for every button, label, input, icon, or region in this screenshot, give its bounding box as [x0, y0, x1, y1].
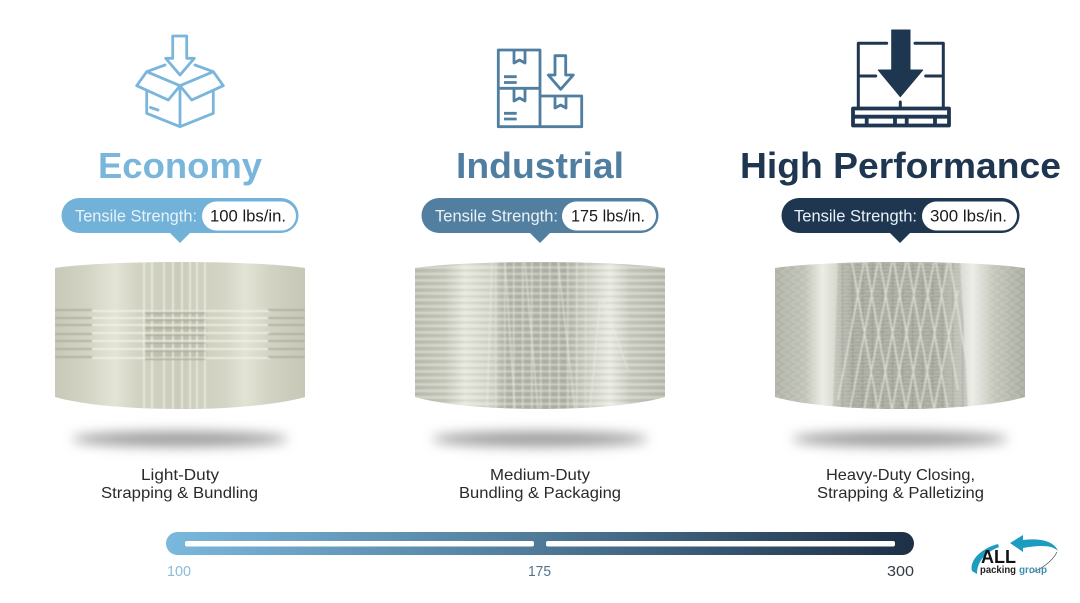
panel: economy: [55, 36, 305, 502]
heading: Industrial: Industrial: [456, 145, 624, 186]
caption: Strapping & Palletizing: [817, 485, 984, 502]
caption: Heavy-Duty Closing,: [826, 467, 975, 484]
tape roll: high performance: [775, 262, 1025, 409]
caption: Bundling & Packaging: [459, 485, 621, 502]
heading: High Performance: High Performance: [740, 145, 1061, 186]
caption: Light-Duty: [141, 467, 219, 484]
tape roll: industrial: [415, 262, 665, 409]
tape roll: economy: [55, 255, 305, 415]
heading: Economy: Economy: [98, 145, 262, 186]
caption: [459, 467, 621, 502]
tensile strength pill: Tensile Strength:: [435, 208, 558, 226]
icon: stacked boxes with arrow: [498, 50, 582, 127]
tensile strength scale bar: [166, 532, 914, 580]
logo: ALL packing group: packing: [980, 565, 1016, 576]
shadow under roll: [792, 432, 1008, 446]
tensile strength scale bar: 300: [887, 563, 914, 580]
caption: [817, 467, 984, 502]
shadow under roll: [72, 432, 288, 446]
tensile strength pill: Tensile Strength:: [794, 208, 917, 226]
tensile strength pill: [61, 198, 298, 243]
tensile strength pill: [422, 198, 658, 243]
tensile strength scale bar: 175: [528, 563, 551, 580]
tensile strength pill: 175 lbs/in.: [571, 208, 645, 226]
caption: Medium-Duty: [490, 467, 590, 484]
logo: ALL packing group: ALL: [981, 547, 1016, 567]
tensile strength pill: [782, 198, 1020, 243]
shadow under roll: [432, 432, 648, 446]
logo: ALL packing group: [972, 535, 1058, 576]
tensile strength pill: 100 lbs/in.: [210, 208, 286, 226]
tensile strength scale bar: 100: [167, 563, 191, 580]
panel: high performance: [740, 30, 1061, 502]
logo: ALL packing group: group: [1019, 565, 1047, 576]
tensile strength pill: 300 lbs/in.: [930, 208, 1007, 226]
tensile strength pill: Tensile Strength:: [75, 208, 197, 226]
panel: industrial: [405, 50, 675, 502]
icon: pallet with heavy arrow: [853, 30, 949, 126]
caption: [101, 467, 258, 502]
icon: box with down arrow: [137, 36, 223, 127]
caption: Strapping & Bundling: [101, 485, 258, 502]
